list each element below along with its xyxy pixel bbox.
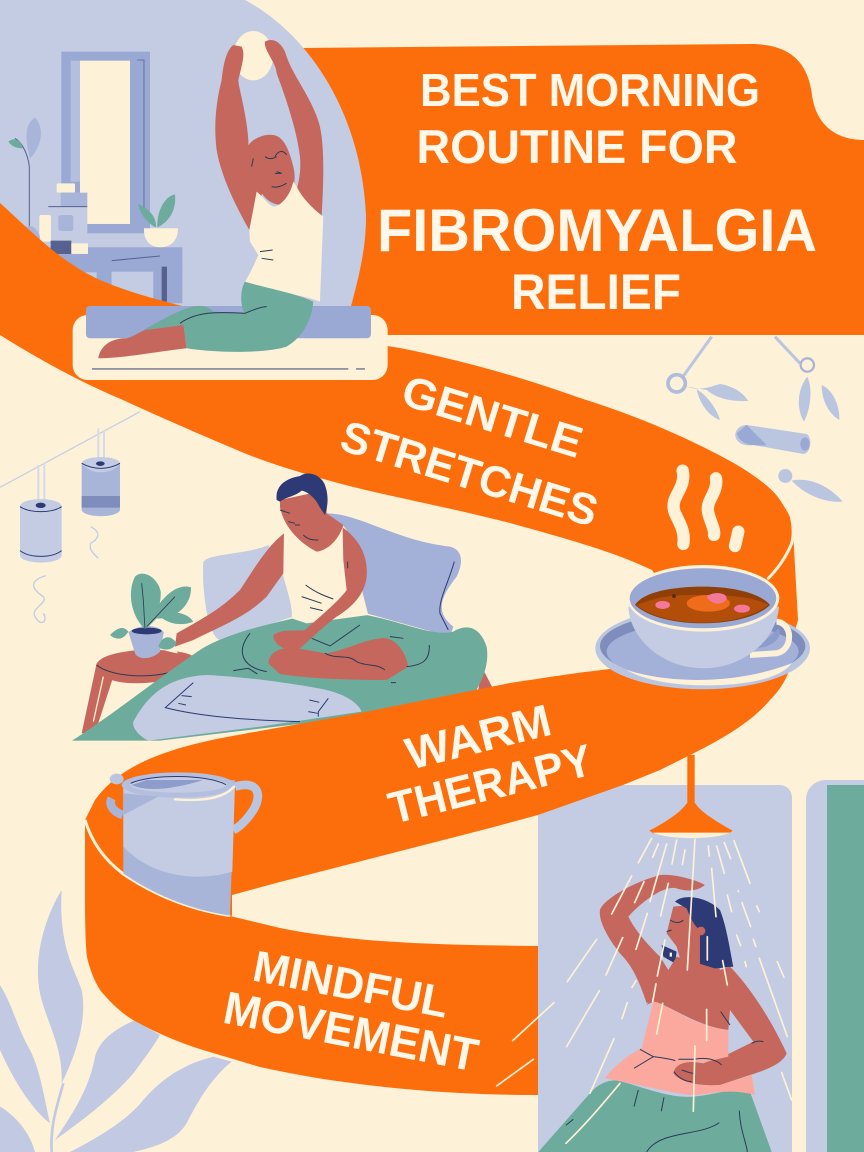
icon: steam and string: [674, 471, 793, 578]
heading: warm therapy: THERAPY: [383, 734, 597, 834]
icon: large background leaves: [0, 890, 232, 1152]
icon: water pitcher: [85, 772, 258, 916]
panel: lavender room background: [0, 0, 366, 325]
figure: stretching person: [98, 31, 323, 358]
title: ROUTINE FOR: [416, 120, 738, 173]
heading: mindful movement: MINDFUL: [249, 942, 453, 1028]
title: BEST MORNING: [420, 64, 760, 116]
icon: hanging cans: [0, 412, 140, 622]
heading: mindful movement: [219, 942, 483, 1081]
ribbon: warm therapy: [85, 666, 790, 916]
icon: soup bowl on saucer: [595, 565, 810, 689]
title: RELIEF: [511, 264, 681, 320]
heading: mindful movement: MOVEMENT: [219, 981, 483, 1081]
figure: seated person on bed: [72, 473, 492, 741]
ribbon: gentle stretches: [0, 203, 798, 665]
panel: green door: [806, 780, 864, 1152]
panel: title banner: [300, 44, 864, 335]
heading: gentle stretches: STRETCHES: [335, 412, 604, 536]
icon: side table with bottles and plant: [8, 117, 182, 305]
heading: gentle stretches: GENTLE: [396, 367, 588, 468]
icon: yoga mat: [73, 306, 388, 380]
ribbon: mindful movement: [85, 820, 538, 1095]
icon: shower water: [497, 838, 792, 1143]
icon: mirror: [61, 52, 150, 233]
title: FIBROMYALGIA: [377, 197, 817, 264]
figure: showering woman: [538, 875, 787, 1152]
panel: shower background: [538, 785, 792, 1152]
heading: warm therapy: WARM: [400, 694, 556, 780]
icon: shower head: [649, 755, 733, 838]
icon: hanging herbs and tube: [668, 337, 843, 502]
title: [377, 64, 817, 320]
